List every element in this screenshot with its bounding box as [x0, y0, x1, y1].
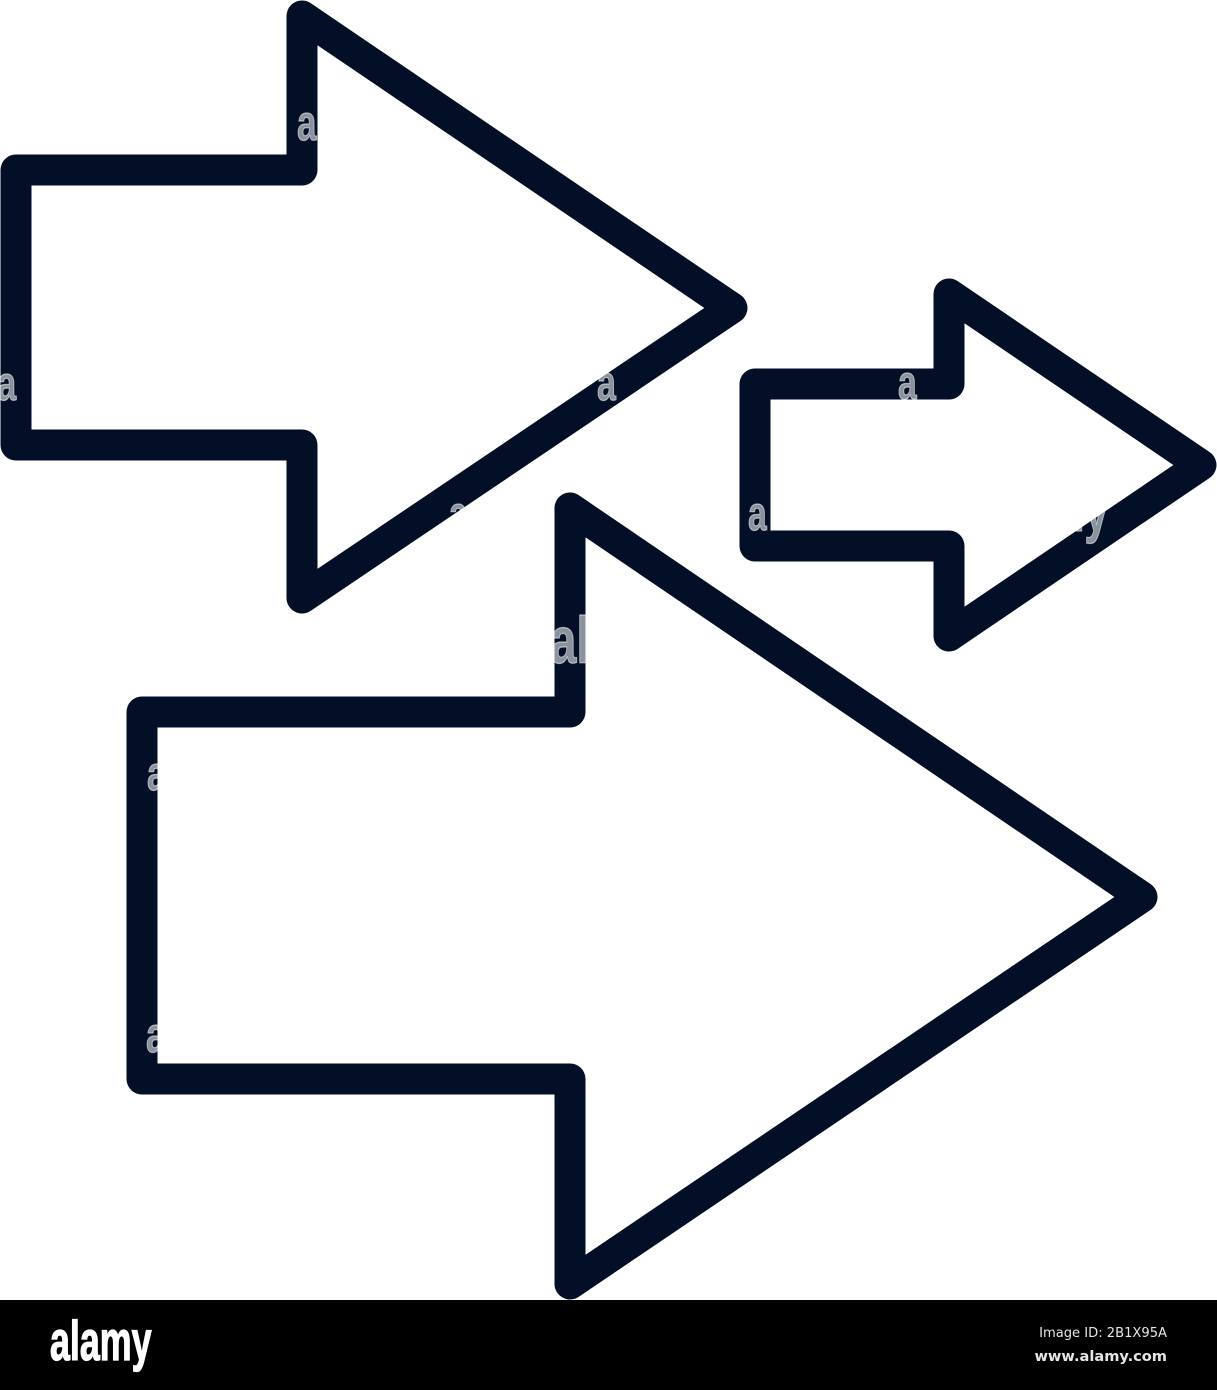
website url: www.alamy.com	[1034, 1348, 1167, 1365]
image id: Image ID: 2B1X95A	[1039, 1326, 1167, 1341]
watermark fragments: al	[550, 604, 590, 678]
watermark fragments: a	[147, 746, 167, 800]
arrow: middle right small	[755, 294, 1201, 636]
watermark fragments: my	[1046, 478, 1108, 545]
arrow: bottom large	[142, 508, 1142, 1284]
watermark fragments: a	[297, 96, 317, 152]
watermark fragments: a	[898, 355, 917, 409]
watermark fragments: a	[449, 486, 468, 540]
logo text: alamy	[50, 1309, 152, 1372]
watermark fragments: a	[748, 486, 767, 540]
watermark fragments: a	[146, 1008, 167, 1063]
arrow: top left	[16, 16, 732, 598]
footer bar	[0, 1300, 1217, 1390]
watermark fragments: a	[597, 356, 617, 412]
watermark fragments	[0, 96, 1108, 1063]
